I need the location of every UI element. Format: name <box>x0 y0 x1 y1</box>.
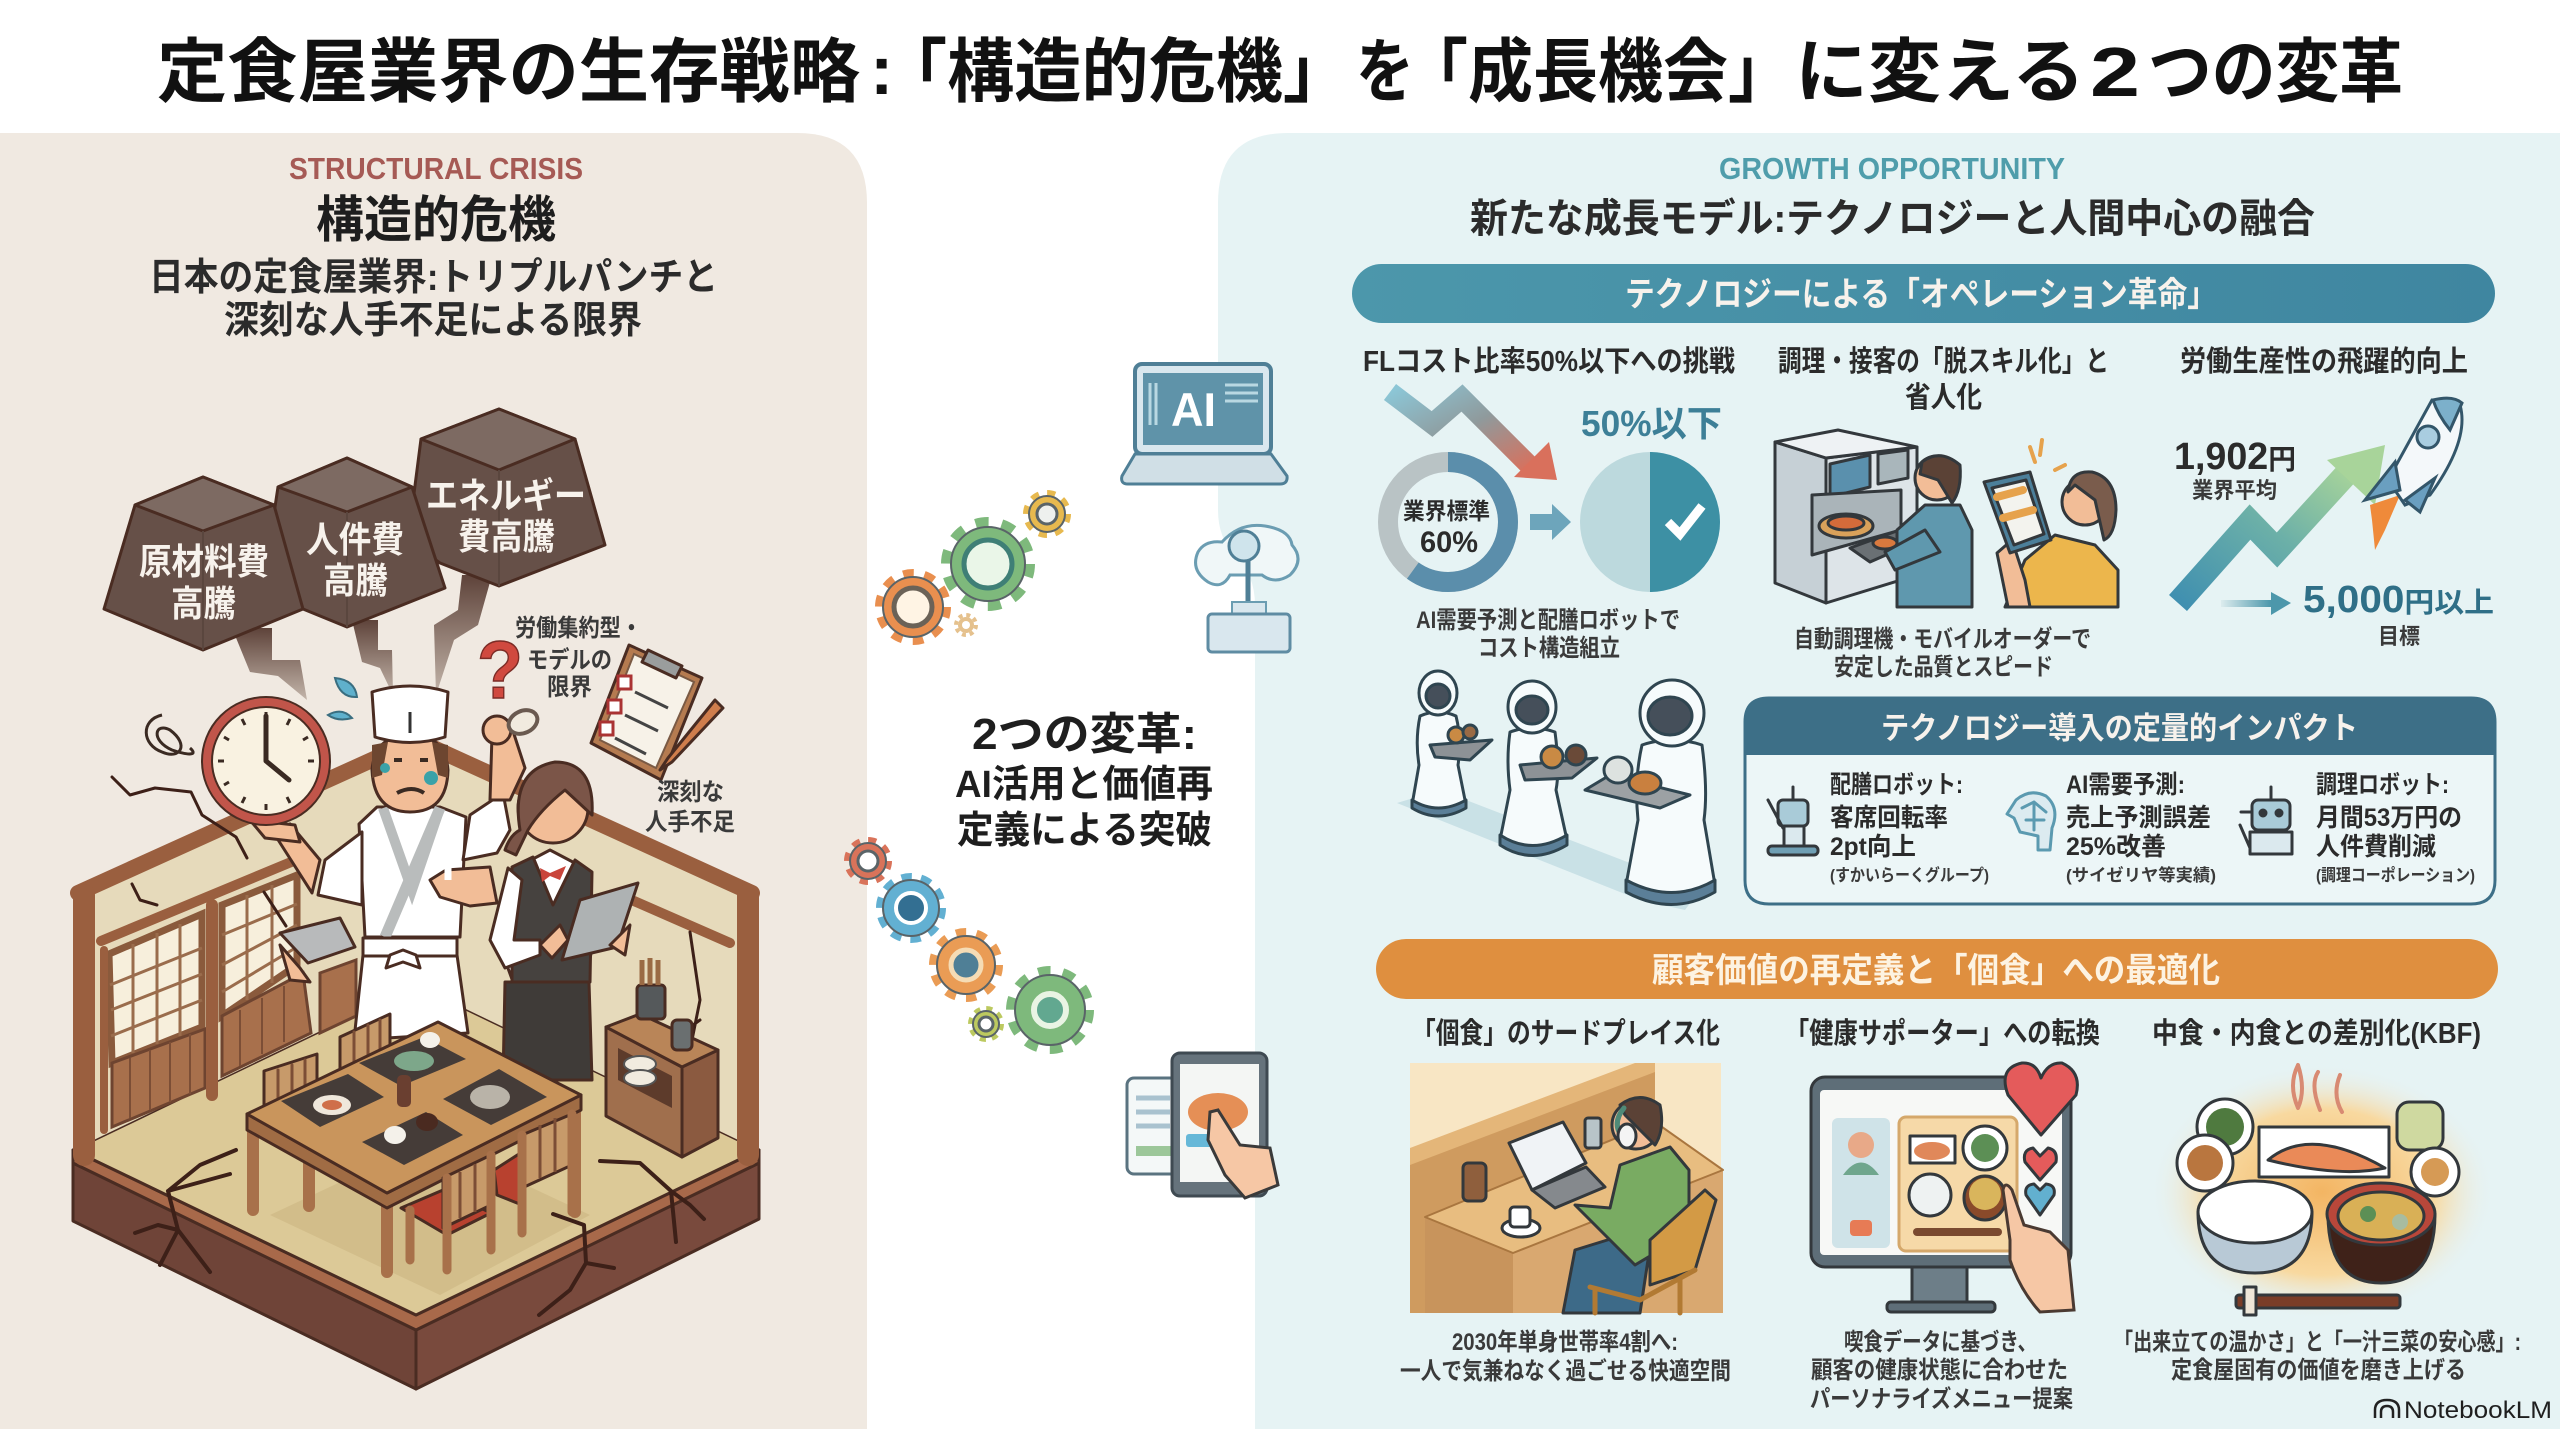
column: differentiation <box>2114 1017 2521 1384</box>
cost block: materials: 原材料費 <box>139 541 269 582</box>
icon: cooking robot <box>2240 787 2292 854</box>
label: structural crisis: STRUCTURAL CRISIS <box>289 151 583 186</box>
caption: quality and speed: 自動調理機・モバイルオーダーで <box>1794 625 2091 653</box>
subtitle: crisis description: 深刻な人手不足による限界 <box>224 300 642 342</box>
icon: question mark: ? <box>477 625 523 716</box>
impact: demand forecast: 25%改善 <box>2066 833 2166 861</box>
icon: AI brain <box>2007 793 2055 850</box>
column: health supporter <box>1785 1017 2100 1413</box>
caption: third place <box>1400 1329 1731 1385</box>
chart: 50 percent target <box>1580 452 1720 592</box>
impact: cooking robot: (調理コーポレーション) <box>2316 865 2475 885</box>
impact: demand forecast: (サイゼリヤ等実績) <box>2066 865 2216 885</box>
heading: productivity: 労働生産性の飛躍的向上 <box>2180 345 2468 378</box>
icon: clipboard <box>591 645 723 780</box>
impact: cooking robot: 調理ロボット: <box>2316 771 2449 799</box>
cost block: labor: 高騰 <box>323 560 388 601</box>
column: third place <box>1400 1017 1731 1385</box>
illustration: teishoku set meal <box>2150 1064 2494 1320</box>
stat: target productivity <box>2303 579 2494 649</box>
icon: AI laptop: AI <box>1171 383 1216 436</box>
title: つの変革 <box>2148 33 2403 111</box>
title: 「成長機会」 <box>1403 33 1793 111</box>
heading: deskilling: 省人化 <box>1905 381 1982 414</box>
stat: current productivity: 1,902円 <box>2174 436 2296 478</box>
gears: upper cluster <box>880 494 1067 640</box>
heading: new growth model: 新たな成長モデル:テクノロジーと人間中心の融合 <box>1470 196 2315 241</box>
chart: rising arrow <box>2178 445 2385 603</box>
caption: differentiation <box>2114 1329 2521 1384</box>
robot 1 <box>1412 671 1492 816</box>
cabinet <box>606 958 718 1157</box>
arrow: to target <box>1530 504 1571 540</box>
caption: quality and speed <box>1794 625 2091 681</box>
icon: pointing hand <box>2003 1185 2074 1312</box>
caption: cost structure: AI需要予測と配膳ロボットで <box>1416 607 1680 634</box>
heading: third place: 「個食」のサードプレイス化 <box>1412 1017 1720 1050</box>
cost block: labor <box>270 458 445 627</box>
impact: cooking robot <box>2316 771 2475 885</box>
stat: current productivity <box>2174 436 2296 503</box>
waitress <box>490 762 638 1080</box>
icon: sweat drops <box>328 678 357 719</box>
cracks <box>112 777 712 1315</box>
caption: third place: 一人で気兼ねなく過ごせる快適空間 <box>1400 1357 1731 1385</box>
title: に変える <box>1795 33 2085 111</box>
watermark: NotebookLM: NotebookLM <box>2404 1397 2552 1424</box>
caption: health supporter <box>1810 1328 2073 1413</box>
icon: rocket <box>2365 398 2462 550</box>
wood beams <box>78 740 752 1155</box>
label: labor-intensive limit: 労働集約型・ <box>515 615 642 642</box>
label: labor shortage: 人手不足 <box>645 809 735 836</box>
icon: tablet with hand <box>1127 1053 1278 1198</box>
central message: AI活用と価値再 <box>955 764 1213 806</box>
central message <box>955 710 1213 852</box>
chart: 60 percent donut: 業界標準 <box>1403 498 1490 524</box>
heading: KBF: 中食・内食との差別化(KBF) <box>2152 1017 2481 1050</box>
impact: serving robot: 配膳ロボット: <box>1830 771 1963 799</box>
robot 3 <box>1585 680 1715 904</box>
central message: 2つの変革: <box>972 710 1197 759</box>
cost block: materials <box>104 477 303 650</box>
caption: health supporter: パーソナライズメニュー提案 <box>1810 1385 2073 1413</box>
label: labor shortage <box>645 779 735 836</box>
cost block: energy: 費高騰 <box>458 516 555 557</box>
column: labor productivity <box>2174 345 2494 649</box>
impact: serving robot: 2pt向上 <box>1830 833 1916 861</box>
label: labor-intensive limit <box>515 615 642 701</box>
illustration: cracked isometric restaurant <box>73 615 759 1389</box>
icon: serving robot <box>1768 787 1818 855</box>
stat: current productivity: 業界平均 <box>2192 478 2277 503</box>
caption: differentiation: 定食屋固有の価値を磨き上げる <box>2171 1357 2466 1384</box>
cost block: energy <box>408 409 605 586</box>
banner: operation revolution: テクノロジーによる「オペレーション革命」 <box>1625 276 2217 314</box>
illustration: customer man <box>1885 456 1972 607</box>
cost block: energy: エネルギー <box>426 475 586 516</box>
chef <box>202 686 541 1040</box>
impact: demand forecast: AI需要予測: <box>2066 771 2185 799</box>
robot 2 <box>1500 681 1597 856</box>
stat: 50 percent or less: 50%以下 <box>1581 403 1722 444</box>
impact: serving robot <box>1830 771 1989 885</box>
subtitle: crisis description: 日本の定食屋業界:トリプルパンチと <box>149 257 718 299</box>
shoji windows <box>109 875 356 1127</box>
stat: target productivity: 目標 <box>2378 624 2420 649</box>
icon: hearts <box>2005 1063 2077 1215</box>
gears: lower cluster <box>848 841 1088 1048</box>
impact: cooking robot: 人件費削減 <box>2316 833 2436 861</box>
table with chairs <box>247 1014 581 1272</box>
illustration: automated cooking machine <box>1775 430 1920 603</box>
heading: deskilling: 調理・接客の「脱スキル化」と <box>1778 345 2109 378</box>
caption: health supporter: 喫食データに基づき、 <box>1844 1328 2037 1356</box>
icon: bolts under cost blocks <box>232 575 492 700</box>
column: deskilling <box>1775 345 2118 681</box>
chart: 60 percent donut <box>1388 462 1508 582</box>
illustration: serving robots <box>1397 671 1715 910</box>
cost block: materials: 高騰 <box>171 583 236 624</box>
heading: impact: テクノロジー導入の定量的インパクト <box>1881 711 2358 746</box>
illustration: woman with tablet <box>1984 440 2118 607</box>
caption: health supporter: 顧客の健康状態に合わせた <box>1811 1357 2068 1384</box>
arrow: to goal <box>2221 592 2291 615</box>
subtitle: crisis description <box>149 257 718 342</box>
illustration: solo diner at counter <box>1410 1063 1723 1313</box>
label: labor-intensive limit: 限界 <box>547 674 592 701</box>
panel: structural crisis <box>0 133 867 1429</box>
column: FL cost <box>1363 345 1735 662</box>
illustration: health menu monitor <box>1811 1077 2071 1312</box>
caption: third place: 2030年単身世帯率4割へ: <box>1452 1329 1678 1356</box>
impact: serving robot: (すかいらーくグループ) <box>1830 865 1989 885</box>
banner: customer value: 顧客価値の再定義と「個食」への最適化 <box>1652 952 2220 990</box>
label: labor-intensive limit: モデルの <box>527 646 612 674</box>
impact: demand forecast: 売上予測誤差 <box>2066 804 2211 832</box>
heading: FL cost: FLコスト比率50%以下への挑戦 <box>1363 345 1735 378</box>
impact: cooking robot: 月間53万円の <box>2316 804 2462 832</box>
cost block: labor: 人件費 <box>306 519 404 560</box>
central message: 定義による突破 <box>957 810 1212 852</box>
label: growth opportunity: GROWTH OPPORTUNITY <box>1719 151 2065 186</box>
heading: structural crisis: 構造的危機 <box>316 192 556 248</box>
title <box>157 31 2403 111</box>
caption: quality and speed: 安定した品質とスピード <box>1834 654 2053 681</box>
title: 定食屋業界の生存戦略 <box>157 33 860 111</box>
panel: quantitative impact <box>1745 698 2495 904</box>
banner: operation revolution <box>1352 264 2495 323</box>
icon: falling arrow <box>1390 392 1557 480</box>
title: 「構造的危機」 <box>880 33 1350 111</box>
stat: target productivity: 5,000円以上 <box>2303 579 2494 621</box>
banner: customer value <box>1376 939 2498 999</box>
title: 2 <box>2090 33 2140 111</box>
clock <box>202 697 330 825</box>
title: を <box>1356 33 1414 111</box>
caption: cost structure: コスト構造組立 <box>1478 635 1620 662</box>
heading: health supporter: 「健康サポーター」への転換 <box>1785 1017 2100 1050</box>
icon: cloud server <box>1196 525 1298 652</box>
title: : <box>870 31 893 109</box>
impact: serving robot: 客席回転率 <box>1830 804 1948 832</box>
label: labor shortage: 深刻な <box>657 779 724 806</box>
icon: AI laptop <box>1122 364 1287 484</box>
caption: cost structure <box>1416 607 1680 662</box>
chart: 60 percent donut: 60% <box>1420 526 1478 559</box>
panel: growth opportunity <box>1218 133 2560 1429</box>
icon: stress scribble <box>146 715 193 754</box>
impact: demand forecast <box>2066 771 2216 885</box>
heading: deskilling <box>1778 345 2109 414</box>
